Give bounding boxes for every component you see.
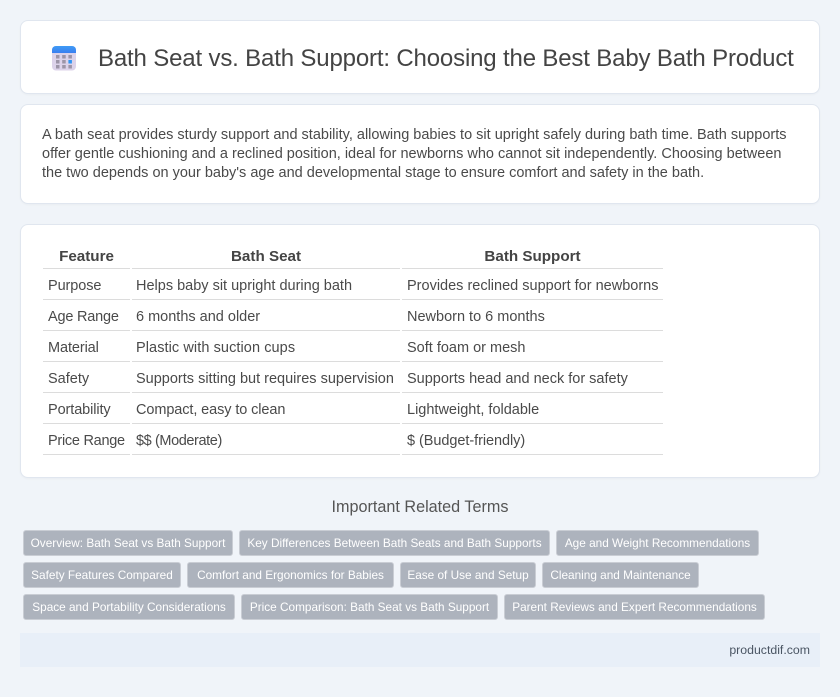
text: line 3: the two depends on your baby's age and developmental stage to ensure comfort and safety in the bath. [42,165,704,181]
panel: header [20,20,820,94]
cell: $ (Budget-friendly) [407,433,525,449]
row: Portability: Portability [48,402,111,418]
tag [556,530,759,556]
cell: Supports sitting but requires supervision [136,371,394,387]
tag: Overview: Bath Seat vs Bath Support [31,536,225,550]
cell: Plastic with suction cups [136,340,295,356]
tag: Age and Weight Recommendations [565,536,750,550]
table header: Bath Seat: Bath Seat [231,248,301,265]
cell: Compact, easy to clean [136,402,285,418]
footer source: productdif.com [729,643,810,657]
tag [542,562,699,588]
panel: intro paragraph [20,104,820,204]
tag [504,594,765,620]
tag [239,530,550,556]
heading: related terms: Important Related Terms [332,498,508,516]
tag [400,562,536,588]
cell: Soft foam or mesh [407,340,525,356]
tag [241,594,498,620]
table header: Bath Support: Bath Support [484,248,581,265]
table header: Feature: Feature [59,248,114,265]
text: line 1: A bath seat provides sturdy support and stability, allowing babies to sit upright safely during bath time. Bath supports [42,127,786,143]
tag: Safety Features Compared [31,568,173,582]
cell: Provides reclined support for newborns [407,278,658,294]
cell: 6 months and older [136,309,260,325]
panel: comparison table [20,224,820,478]
tag: Ease of Use and Setup [407,568,529,582]
cell: Helps baby sit upright during bath [136,278,352,294]
row: Safety: Safety [48,371,89,387]
tag: Key Differences Between Bath Seats and Bath Supports [247,536,542,550]
tag: Space and Portability Considerations [32,600,226,614]
tag [187,562,394,588]
text: line 2: offer gentle cushioning and a reclined position, ideal for newborns who cannot sit independently. Choosing between [42,146,781,162]
cell: Supports head and neck for safety [407,371,628,387]
tag: Parent Reviews and Expert Recommendations [512,600,757,614]
cell: Lightweight, foldable [407,402,539,418]
row: Age Range: Age Range [48,309,119,325]
tag: Cleaning and Maintenance [550,568,691,582]
row: Price Range: Price Range [48,433,125,449]
tag [23,594,235,620]
row: Material: Material [48,340,99,356]
tag [23,530,233,556]
tag: Comfort and Ergonomics for Babies [197,568,384,582]
row: Purpose: Purpose [48,278,101,294]
tag [23,562,181,588]
footer bar [20,633,820,667]
tag: Price Comparison: Bath Seat vs Bath Support [250,600,489,614]
cell: $$ (Moderate) [136,433,222,449]
cell: Newborn to 6 months [407,309,545,325]
icon: calendar [52,46,76,70]
title: Bath Seat vs. Bath Support: Choosing the Best Baby Bath Product [98,45,794,72]
